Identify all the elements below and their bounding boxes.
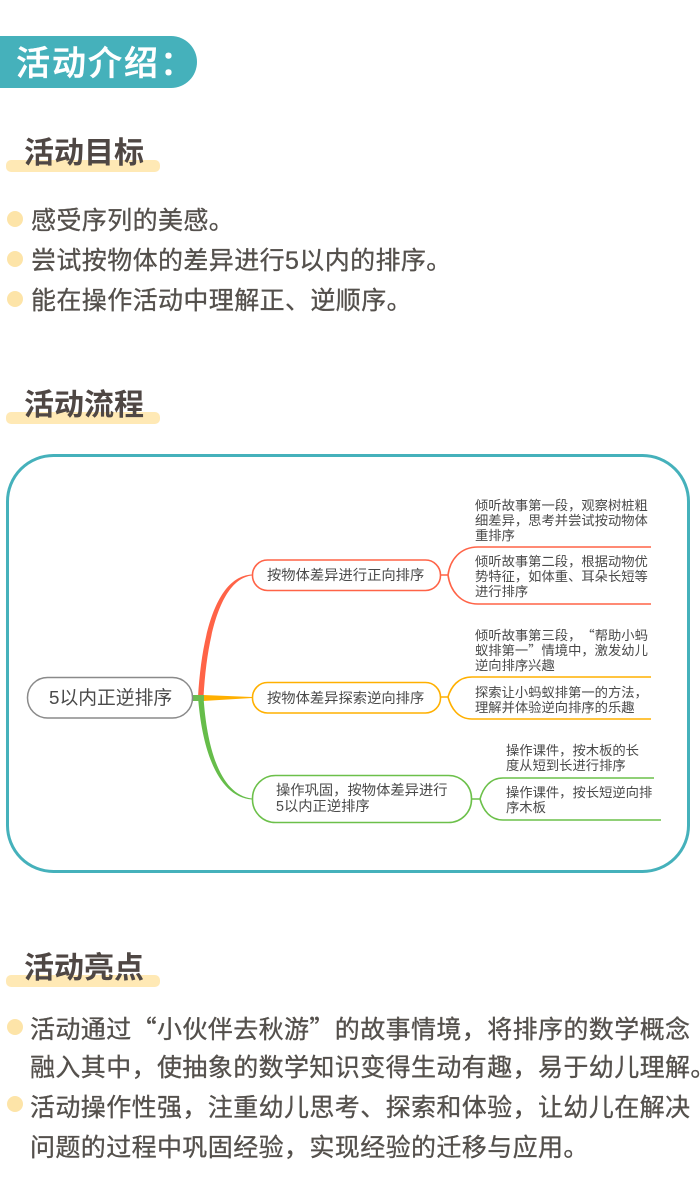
goal 2: 尝试按物体的差异进行5以内的排序。 bbox=[31, 247, 452, 275]
leaf text 3 bbox=[475, 625, 648, 673]
title pill: 活动介绍 bbox=[0, 36, 197, 88]
node: consolidate: 5以内正逆排序 bbox=[276, 798, 370, 815]
node: forward sort bbox=[252, 560, 440, 590]
highlights list bbox=[7, 1010, 700, 1162]
goals list bbox=[7, 207, 452, 315]
heading: 活动目标: 活动目标 bbox=[24, 137, 144, 170]
leaf text 6: 操作课件，按长短逆向排 bbox=[506, 785, 652, 800]
leaf text 4: 探索让小蚂蚁排第一的方法， bbox=[475, 684, 648, 700]
root node: 5以内正逆排序 bbox=[49, 687, 172, 708]
branch: red curve bbox=[198, 574, 252, 697]
highlight 1: 活动通过 小伙伴去秋游 的故事情境，将排序的数学概念 bbox=[30, 1016, 690, 1044]
leaf text 2 bbox=[475, 553, 648, 599]
orange leaf bracket bbox=[441, 677, 651, 719]
highlight 1: 融入其中，使抽象的数学知识变得生动有趣，易于幼儿理解。 bbox=[30, 1054, 700, 1082]
leaf text 4: 理解并体验逆向排序的乐趣 bbox=[475, 700, 635, 715]
leaf text 5 bbox=[506, 743, 639, 773]
branch: orange wedge bbox=[203, 695, 252, 701]
highlight 2 bbox=[7, 1094, 690, 1162]
title text: 活动介绍： bbox=[16, 45, 196, 83]
leaf text 3: 逆向排序兴趣 bbox=[475, 658, 555, 673]
leaf text 6: 序木板 bbox=[506, 800, 546, 815]
leaf text 1: 倾听故事第一段，观察树桩粗 bbox=[475, 497, 648, 513]
leaf text 1: 重排序 bbox=[475, 528, 515, 543]
leaf text 3: 帮助小蚂 bbox=[595, 628, 648, 643]
node: consolidate: 操作巩固，按物体差异进行 bbox=[276, 782, 448, 799]
highlight 1: ” bbox=[309, 1010, 335, 1046]
leaf text 2: 进行排序 bbox=[475, 584, 528, 599]
root connector bbox=[193, 695, 204, 701]
leaf text 4 bbox=[475, 684, 648, 715]
heading: 活动流程: 活动流程 bbox=[24, 389, 144, 422]
goal 3: 能在操作活动中理解正、逆顺序。 bbox=[31, 287, 412, 315]
node: consolidate bbox=[252, 776, 472, 822]
leaf text 2: 倾听故事第二段，根据动物优 bbox=[475, 553, 648, 569]
branch: green curve bbox=[198, 697, 252, 800]
leaf text 3: “ bbox=[581, 625, 595, 644]
node: reverse sort: 按物体差异探索逆向排序 bbox=[267, 690, 424, 707]
highlight 1: “ bbox=[132, 1010, 157, 1046]
leaf text 3: ” bbox=[528, 640, 541, 659]
node: reverse sort bbox=[252, 682, 440, 713]
heading: 活动亮点: 活动亮点 bbox=[24, 952, 144, 985]
leaf text 5: 操作课件，按木板的长 bbox=[506, 743, 639, 758]
leaf text 6 bbox=[506, 785, 652, 815]
leaf text 3: 情境中，激发幼儿 bbox=[542, 643, 648, 658]
root node bbox=[28, 678, 192, 718]
red leaf bracket bbox=[441, 547, 651, 604]
leaf text 5: 度从短到长进行排序 bbox=[506, 758, 626, 773]
leaf text 1: 细差异，思考并尝试按动物体 bbox=[475, 513, 648, 528]
highlight 1 bbox=[7, 1010, 700, 1082]
goal 1: 感受序列的美感。 bbox=[31, 207, 234, 235]
node: forward sort: 按物体差异进行正向排序 bbox=[267, 567, 424, 584]
leaf text 1 bbox=[475, 497, 648, 543]
leaf text 2: 势特征，如体重、耳朵长短等 bbox=[475, 568, 648, 584]
leaf text 3: 蚁排第一 bbox=[475, 643, 528, 658]
leaf text 3: 倾听故事第三段， bbox=[475, 628, 581, 643]
highlight 2: 问题的过程中巩固经验，实现经验的迁移与应用。 bbox=[30, 1134, 589, 1162]
highlight 2: 活动操作性强，注重幼儿思考、探索和体验，让幼儿在解决 bbox=[30, 1094, 690, 1122]
green leaf bracket bbox=[472, 778, 661, 820]
